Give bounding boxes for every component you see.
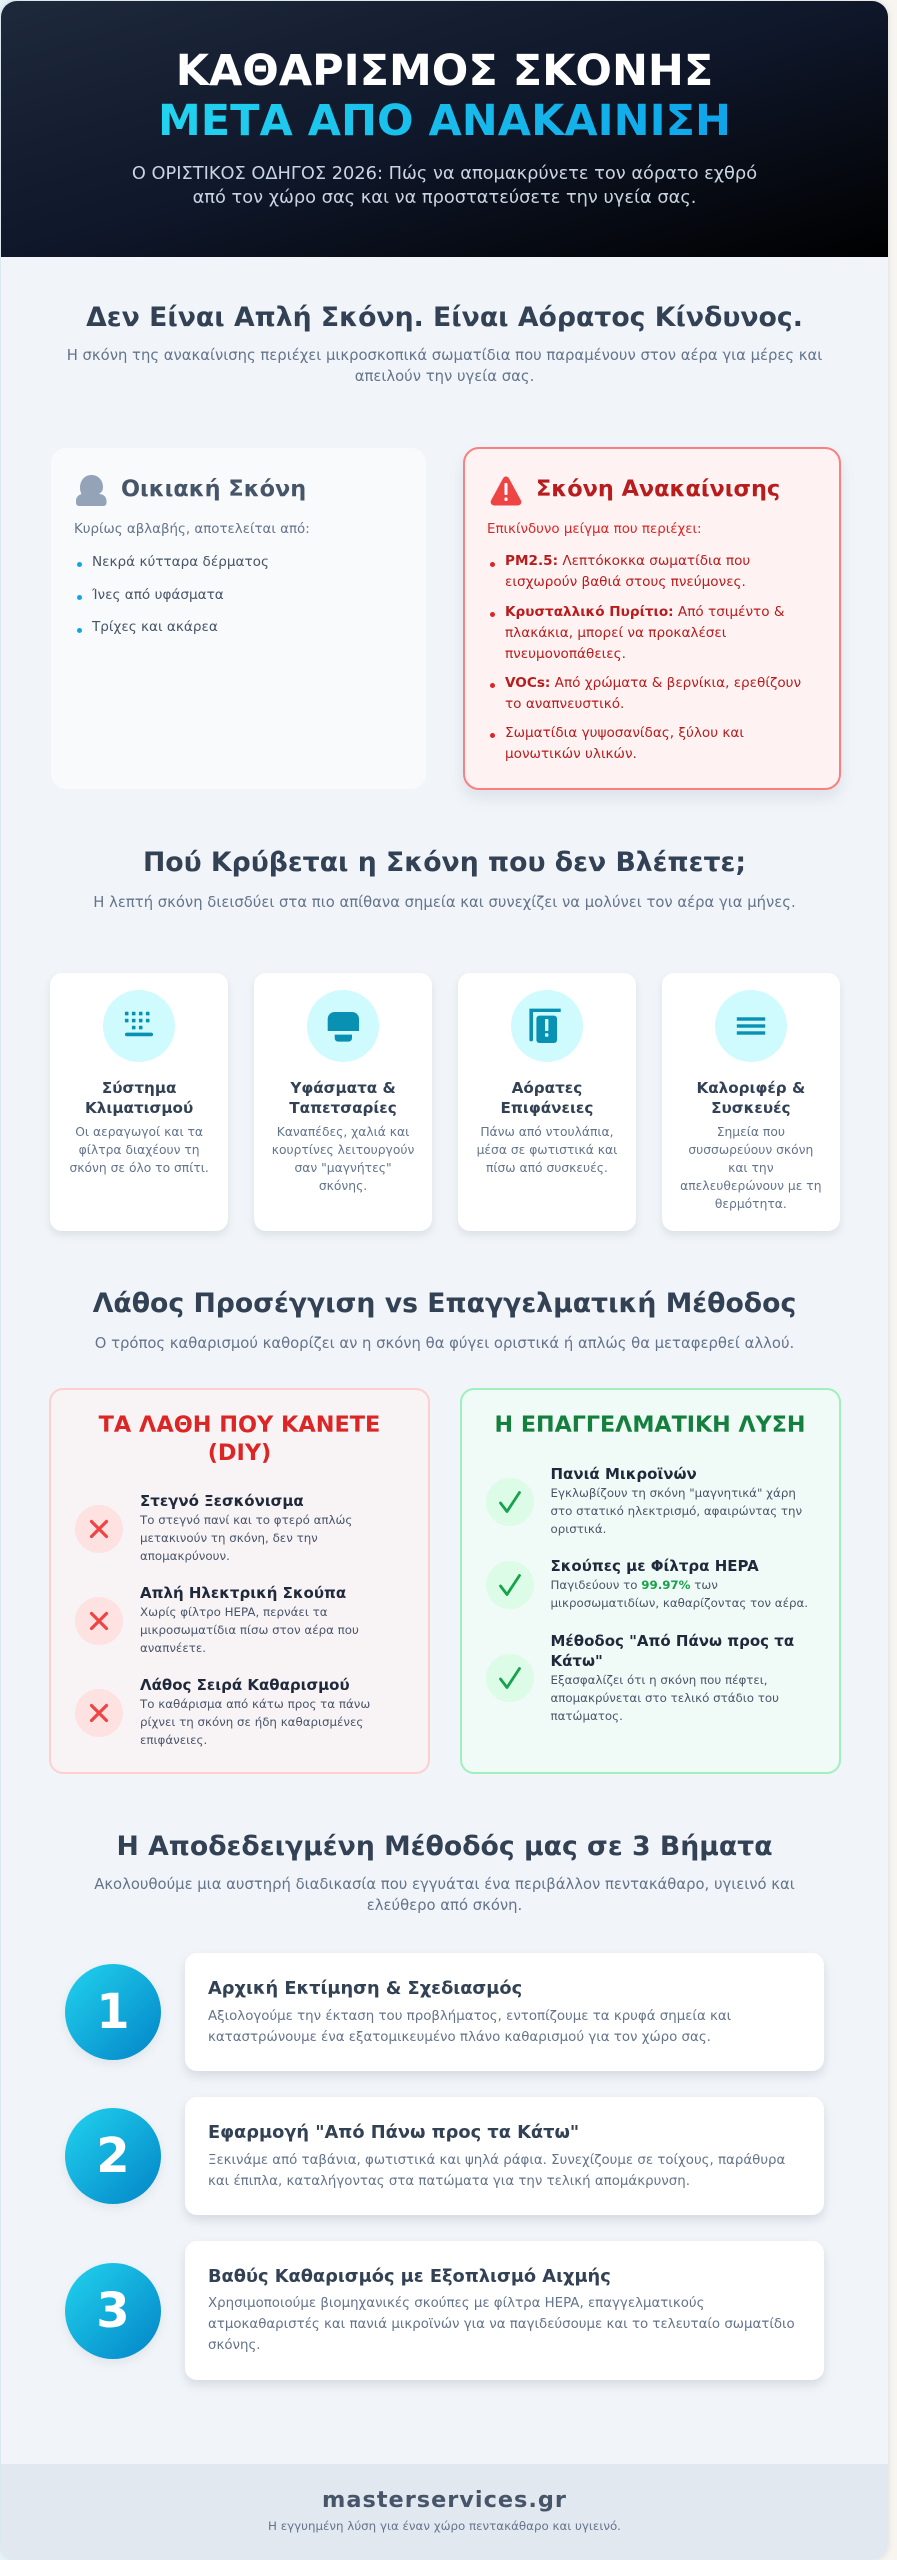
card title: Συσκευές [711, 1099, 791, 1117]
bullet 4 [490, 733, 495, 738]
section intro: comparison: Ο τρόπος καθαρισμού καθορίζει αν η σκόνη θα φύγει οριστικά ή απλώς θα μεταφερθεί αλλού. [95, 1335, 794, 1352]
item text: απομακρύνεται στο τελικό στάδιο του [550, 1691, 779, 1705]
card text [477, 1125, 617, 1175]
card text: Σημεία που [717, 1125, 785, 1139]
card title: Σύστημα [102, 1079, 176, 1097]
mistake: simple vacuum [75, 1584, 359, 1655]
card title [501, 1079, 593, 1117]
bullet 3 [77, 628, 82, 633]
step text: Ξεκινάμε από ταβάνια, φωτιστικά και ψηλά ράφια. Συνεχίζουμε σε τοίχους, παράθυρα [208, 2153, 785, 2168]
item 1: εισχωρούν βαθιά στους πνεύμονες. [505, 574, 746, 590]
section heading: hiding places: Πού Κρύβεται η Σκόνη που δεν Βλέπετε; [143, 847, 746, 878]
icon: check [486, 1654, 534, 1702]
subtitle [132, 163, 757, 208]
item text: αναπνέετε. [140, 1641, 206, 1655]
item title [550, 1632, 794, 1670]
item text: απομακρύνουν. [140, 1549, 230, 1563]
item text: Εξασφαλίζει ότι η σκόνη που πέφτει, [550, 1673, 768, 1687]
panel intro: Επικίνδυνο μείγμα που περιέχει: [487, 522, 702, 537]
solution: microfiber [486, 1465, 802, 1536]
item 3: Τρίχες και ακάρεα [92, 619, 218, 635]
icon: dust person [76, 475, 106, 506]
panel: DIY mistakes [49, 1388, 430, 1774]
step text: Αξιολογούμε την έκταση του προβλήματος, εντοπίζουμε τα κρυφά σημεία και [208, 2009, 731, 2024]
icon: air vent [103, 990, 175, 1062]
step text [208, 2009, 731, 2045]
item text: Το στεγνό πανί και το φτερό απλώς [140, 1513, 352, 1527]
section intro: invisible danger: απειλούν την υγεία σας. [355, 368, 534, 385]
icon: warning triangle [490, 476, 522, 506]
item title: Μέθοδος "Από Πάνω προς τα [550, 1632, 794, 1650]
item 3: το αναπνευστικό. [505, 696, 624, 712]
card: fabrics [254, 973, 432, 1231]
panel title: ΤΑ ΛΑΘΗ ΠΟΥ ΚΑΝΕΤΕ [99, 1412, 380, 1438]
item text: στο στατικό ηλεκτρισμό, αφαιρώντας την [550, 1504, 802, 1518]
item 1 [505, 553, 750, 590]
card text: απελευθερώνουν με τη [680, 1179, 822, 1193]
card title [85, 1079, 193, 1117]
item title: Σκούπες με Φίλτρα HEPA [550, 1557, 759, 1575]
item 3: VOCs: Από χρώματα & βερνίκια, ερεθίζουν [505, 675, 801, 691]
list: renovation dust [490, 553, 801, 762]
item title: Πανιά Μικροϊνών [550, 1465, 697, 1483]
item 2: Κρυσταλλικό Πυρίτιο: Από τσιμέντο & [505, 604, 784, 620]
panel title: Σκόνη Ανακαίνισης [536, 476, 780, 502]
item text: Το καθάρισμα από κάτω προς τα πάνω [140, 1697, 370, 1711]
card title: Ταπετσαρίες [289, 1099, 397, 1117]
panel title [98, 1412, 380, 1466]
card text: σαν "μαγνήτες" [294, 1161, 392, 1175]
step text: Χρησιμοποιούμε βιομηχανικές σκούπες με φίλτρα HEPA, επαγγελματικούς [208, 2296, 704, 2311]
icon: cross [75, 1689, 123, 1737]
step card 2 [185, 2097, 824, 2215]
bullet 1 [77, 562, 82, 567]
panel title: Οικιακή Σκόνη [121, 476, 306, 502]
item title: Κάτω" [550, 1652, 603, 1670]
step text [208, 2153, 785, 2189]
footer brand: masterservices.gr [322, 2487, 567, 2513]
section intro: method [94, 1876, 795, 1914]
title: ΜΕΤΑ ΑΠΟ ΑΝΑΚΑΙΝΙΣΗ [158, 96, 731, 146]
subtitle: Ο ΟΡΙΣΤΙΚΟΣ ΟΔΗΓΟΣ 2026: Πώς να απομακρύνετε τον αόρατο εχθρό [132, 163, 757, 184]
card text: φίλτρα διαχέουν τη [79, 1143, 200, 1157]
step text: καταστρώνουμε ένα εξατομικευμένο πλάνο καθαρισμού για τον χώρο σας. [208, 2030, 711, 2045]
bullet 3 [490, 683, 495, 688]
step text [208, 2296, 795, 2353]
card title: Επιφάνειες [501, 1099, 593, 1117]
section heading: invisible danger: Δεν Είναι Απλή Σκόνη. Είναι Αόρατος Κίνδυνος. [86, 302, 803, 333]
step card 1 [185, 1953, 824, 2071]
item 4: Σωματίδια γυψοσανίδας, ξύλου και [505, 725, 744, 741]
item text [140, 1605, 359, 1655]
bullet 2 [490, 612, 495, 617]
card text: Καναπέδες, χαλιά και [277, 1125, 409, 1139]
item 4: μονωτικών υλικών. [505, 746, 637, 762]
subtitle: από τον χώρο σας και να προστατεύσετε την υγεία σας. [193, 187, 696, 208]
card text [272, 1125, 414, 1193]
item title: Λάθος Σειρά Καθαρισμού [140, 1676, 350, 1694]
card text [69, 1125, 209, 1175]
card text: Οι αεραγωγοί και τα [75, 1125, 203, 1139]
item title: Στεγνό Ξεσκόνισμα [140, 1492, 304, 1510]
step number 2 [65, 2108, 161, 2204]
item 1: Νεκρά κύτταρα δέρματος [92, 554, 269, 570]
step title: Βαθύς Καθαρισμός με Εξοπλισμό Αιχμής [208, 2266, 611, 2287]
card text [680, 1125, 822, 1211]
item text: μετακινούν τη σκόνη, δεν την [140, 1531, 318, 1545]
item text: Χωρίς φίλτρο HEPA, περνάει τα [140, 1605, 328, 1619]
icon: cross [75, 1597, 123, 1645]
item 1: PM2.5: Λεπτόκοκκα σωματίδια που [505, 553, 750, 569]
icon: check [486, 1561, 534, 1609]
item text [140, 1513, 352, 1563]
section intro: method: ελεύθερο από σκόνη. [367, 1897, 522, 1914]
section intro: method: Ακολουθούμε μια αυστηρή διαδικασία που εγγυάται ένα περιβάλλον πεντακάθαρο, υγιεινό και [94, 1876, 795, 1893]
step number 3: 3 [96, 2283, 130, 2339]
item 2: πλακάκια, μπορεί να προκαλέσει [505, 625, 726, 641]
solution: top to bottom [486, 1632, 794, 1723]
icon: check [486, 1478, 534, 1526]
bullet 2 [77, 595, 82, 600]
item text: μικροσωματίδια πίσω στον αέρα που [140, 1623, 359, 1637]
panel: professional solution [460, 1388, 840, 1774]
item text [550, 1578, 808, 1610]
item text [550, 1673, 779, 1723]
section heading: comparison: Λάθος Προσέγγιση vs Επαγγελματική Μέθοδος [93, 1288, 796, 1319]
card: invisible surfaces [458, 973, 636, 1231]
item text [550, 1486, 802, 1536]
mistake: wrong order [75, 1676, 370, 1747]
card title [696, 1079, 805, 1117]
panel title: (DIY) [208, 1440, 271, 1466]
card text: Πάνω από ντουλάπια, [480, 1125, 614, 1139]
card title: Κλιματισμού [85, 1099, 193, 1117]
panel title: Η ΕΠΑΓΓΕΛΜΑΤΙΚΗ ΛΥΣΗ [495, 1412, 805, 1438]
panel intro: Κυρίως αβλαβής, αποτελείται από: [74, 522, 310, 537]
step text: και έπιπλα, καταλήγοντας στα πατώματα για την τελική απομάκρυνση. [208, 2174, 690, 2189]
mistake: dry dusting [75, 1492, 352, 1563]
bullet 1 [490, 562, 495, 567]
icon: hidden surface [511, 990, 583, 1062]
card text: μέσα σε φωτιστικά και [477, 1143, 617, 1157]
card title [289, 1079, 397, 1117]
card text: πίσω από συσκευές. [486, 1161, 608, 1175]
icon: cross [75, 1505, 123, 1553]
item text: Εγκλωβίζουν τη σκόνη "μαγνητικά" χάρη [550, 1486, 796, 1500]
title: ΚΑΘΑΡΙΣΜΟΣ ΣΚΟΝΗΣ [176, 46, 713, 96]
item text: επιφάνειες. [140, 1733, 207, 1747]
list: household dust [77, 554, 269, 635]
item 2: πνευμονοπάθειες. [505, 646, 626, 662]
step text: ατμοκαθαριστές και πανιά μικροϊνών για να παγιδεύσουμε και το τελευταίο σωματίδιο [208, 2317, 795, 2332]
item 2 [505, 604, 784, 662]
step number 1 [65, 1964, 161, 2060]
step title: Εφαρμογή "Από Πάνω προς τα Κάτω" [208, 2122, 579, 2143]
card: radiators [662, 973, 840, 1231]
step title: Αρχική Εκτίμηση & Σχεδιασμός [208, 1978, 522, 1999]
item text: ρίχνει τη σκόνη σε ήδη καθαρισμένες [140, 1715, 363, 1729]
card title: Καλοριφέρ & [696, 1079, 805, 1097]
card text: και την [728, 1161, 774, 1175]
item 3 [505, 675, 801, 712]
card text: σκόνη σε όλο το σπίτι. [69, 1161, 209, 1175]
icon: sofa lamp [307, 990, 379, 1062]
footer tagline: Η εγγυημένη λύση για έναν χώρο πεντακάθαρο και υγιεινό. [268, 2519, 621, 2533]
section intro: hiding places: Η λεπτή σκόνη διεισδύει στα πιο απίθανα σημεία και συνεχίζει να μολύνει τον αέρα για μήνες. [93, 894, 796, 911]
item text: Παγιδεύουν το 99.97% των [550, 1578, 718, 1592]
footer [1, 2464, 888, 2560]
panel: renovation dust [463, 447, 841, 790]
step card 3 [185, 2241, 824, 2380]
card title: Αόρατες [512, 1079, 582, 1097]
card title: Υφάσματα & [290, 1079, 396, 1097]
step number 2: 2 [96, 2128, 130, 2184]
solution: HEPA vacuums [486, 1557, 808, 1610]
card text: κουρτίνες λειτουργούν [272, 1143, 414, 1157]
card text: θερμότητα. [715, 1197, 787, 1211]
title [158, 46, 731, 146]
item 2: Ίνες από υφάσματα [92, 587, 224, 603]
item text: μικροσωματιδίων, καθαρίζοντας τον αέρα. [550, 1596, 808, 1610]
header banner [1, 1, 888, 257]
item title: Απλή Ηλεκτρική Σκούπα [140, 1584, 346, 1602]
icon: radiator bars [715, 990, 787, 1062]
card text: σκόνης. [319, 1179, 367, 1193]
panel: household dust [50, 447, 427, 790]
section intro: invisible danger: Η σκόνη της ανακαίνισης περιέχει μικροσκοπικά σωματίδια που παραμένουν στον αέρα για μέρες και [67, 347, 822, 364]
item text: οριστικά. [550, 1522, 606, 1536]
section intro: invisible danger [67, 347, 822, 385]
section heading: method: Η Αποδεδειγμένη Μέθοδός μας σε 3 Βήματα [116, 1831, 773, 1862]
item text: πατώματος. [550, 1709, 623, 1723]
step number 1: 1 [96, 1984, 130, 2040]
item 4 [505, 725, 744, 762]
step text: σκόνης. [208, 2338, 261, 2353]
step number 3 [65, 2263, 161, 2359]
item text [140, 1697, 370, 1747]
card text: συσσωρεύουν σκόνη [688, 1143, 813, 1157]
card: air conditioning [50, 973, 228, 1231]
